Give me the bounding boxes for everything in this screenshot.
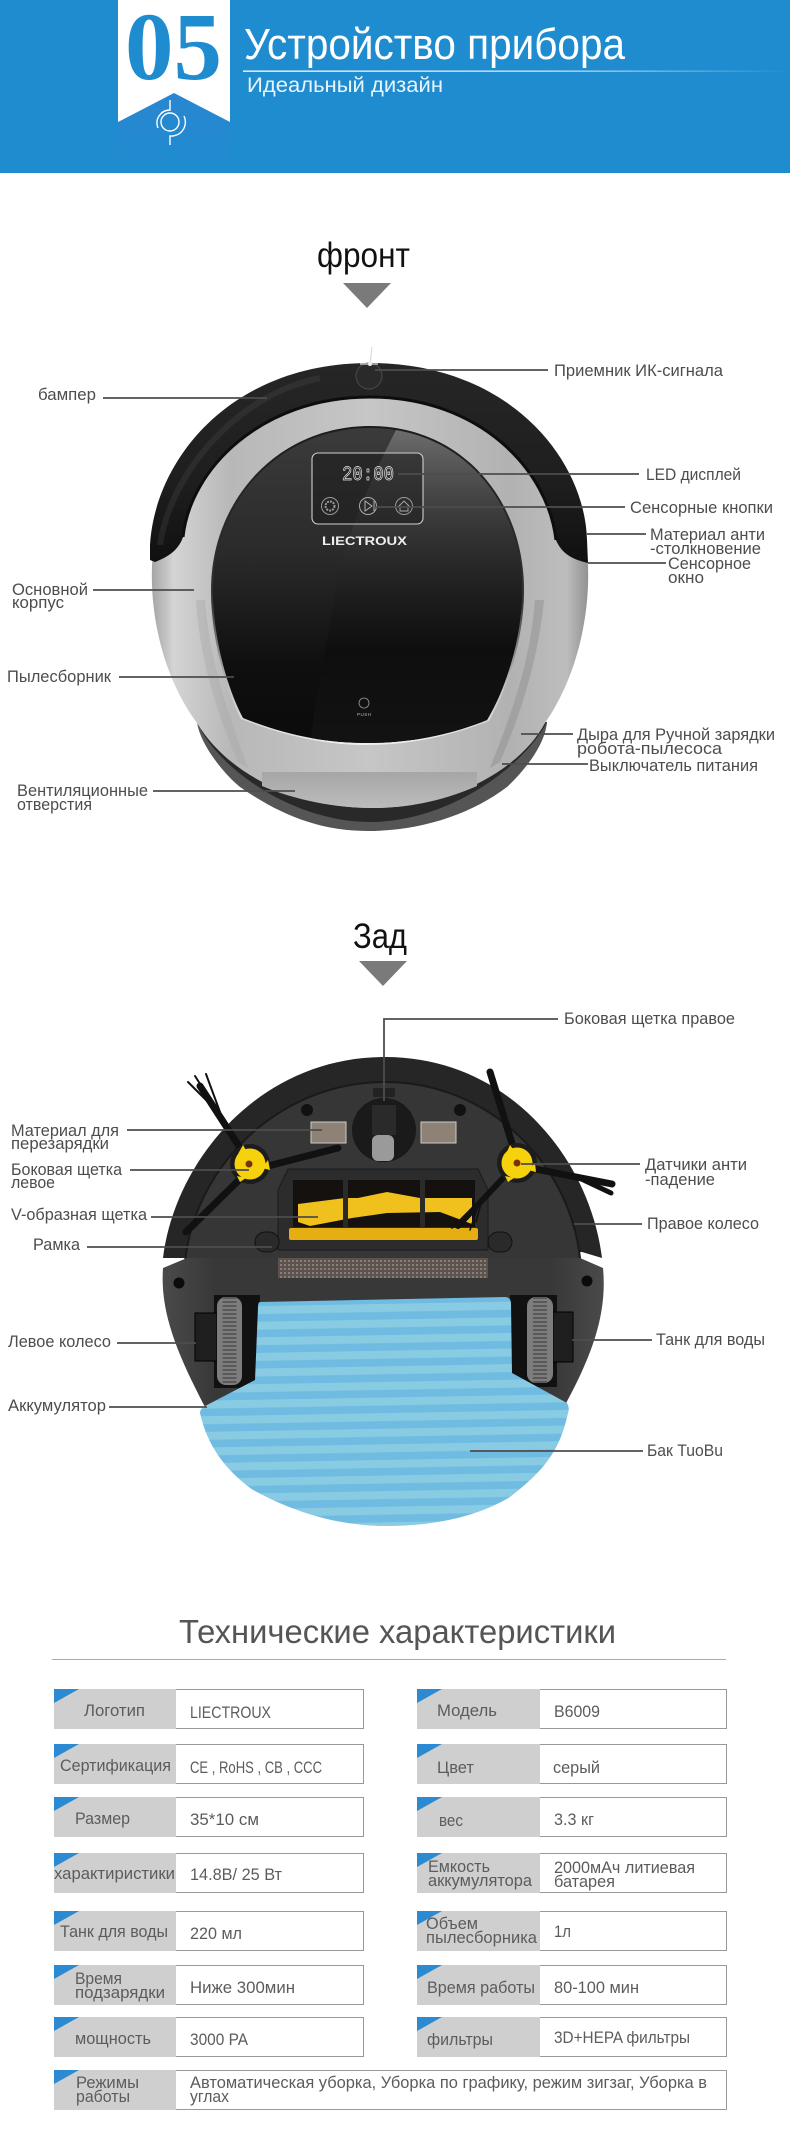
callouts: front view [7, 362, 775, 814]
row: modes: работы [76, 2087, 130, 2106]
robot front view [150, 347, 588, 831]
callout: sensor window [588, 555, 751, 587]
row: model [417, 1689, 726, 1729]
callout: manual charging hole: Дыра для Ручной зарядки [577, 726, 775, 744]
caster wheel [352, 1088, 416, 1162]
row: size [54, 1797, 364, 1837]
brush compartment [255, 1169, 512, 1252]
row: battery capacity: Емкость [428, 1857, 490, 1876]
IR receiver [356, 347, 382, 389]
callout: power switch: Выключатель питания [589, 757, 758, 775]
callout: anti-collision material: Материал анти [650, 526, 765, 544]
callout: frame: Рамка [33, 1236, 81, 1254]
callout: anti-drop sensors: -падение [645, 1171, 715, 1189]
callout: sensor window: окно [668, 569, 704, 587]
callout: sensor window: Сенсорное [668, 555, 751, 573]
heading: front [317, 236, 410, 308]
row: filters: 3D+HEPA фильтры [554, 2028, 690, 2047]
row: logo: Логотип [84, 1701, 145, 1720]
row: modes: Режимы [76, 2073, 139, 2092]
row: battery capacity [417, 1853, 726, 1893]
right drive wheel [510, 1295, 573, 1387]
right side brush [452, 1072, 612, 1230]
callout: anti-drop sensors [521, 1156, 747, 1189]
row: dust bin volume: Объем [426, 1914, 478, 1933]
heading: back [353, 917, 407, 986]
left drive wheel [195, 1295, 260, 1388]
row: working time: Время работы [427, 1978, 535, 1997]
row: model: Модель [437, 1701, 497, 1720]
row: water tank: Танк для воды [60, 1922, 168, 1941]
rear bumper [163, 1057, 602, 1258]
row: water tank: 220 мл [190, 1924, 242, 1943]
row: power: мощность [75, 2029, 151, 2048]
row: modes: Автоматическая уборка, Уборка по графику, режим зигзаг, Уборка в [190, 2073, 707, 2092]
row: modes: углах [190, 2087, 229, 2106]
callout: vents: отверстия [17, 796, 92, 814]
callout: bumper: бампер [38, 386, 96, 404]
left side brush [186, 1074, 338, 1232]
callout: vents [17, 782, 295, 814]
row: color: серый [553, 1758, 600, 1777]
row: modes [54, 2070, 726, 2110]
callout: anti-drop sensors: Датчики анти [645, 1156, 747, 1174]
row: certification: CE , RoHS , CB , CCC [190, 1758, 322, 1777]
row: dust bin volume: 1л [554, 1922, 571, 1941]
row: working time: 80-100 мин [554, 1978, 639, 1997]
row: size: Размер [75, 1809, 130, 1828]
row: weight [417, 1797, 726, 1837]
row: dust bin volume: пылесборника [426, 1928, 538, 1947]
callouts: back view [8, 1010, 765, 1460]
row: model: B6009 [554, 1702, 600, 1721]
callout: LED display: LED дисплей [646, 466, 741, 484]
callout: main body [12, 581, 194, 612]
callout: charging material: перезарядки [11, 1135, 109, 1153]
callout: battery: Аккумулятор [8, 1397, 106, 1415]
row: dust bin volume [417, 1911, 726, 1951]
callout: left side brush: Боковая щетка [11, 1161, 123, 1179]
callout: charging material: Материал для [11, 1122, 119, 1140]
callout: anti-collision material: -столкновение [650, 540, 761, 558]
specs heading: Технические характеристики [179, 1613, 616, 1650]
callout: manual charging hole: робота-пылесоса [577, 740, 723, 758]
header banner [0, 0, 790, 173]
row: weight: вес [439, 1811, 463, 1830]
row: color: Цвет [437, 1758, 474, 1777]
row: filters [417, 2017, 726, 2057]
callout: vents: Вентиляционные [17, 782, 148, 800]
callout: left wheel: Левое колесо [8, 1333, 111, 1351]
row: logo: LIECTROUX [190, 1703, 271, 1722]
row: battery capacity: аккумулятора [428, 1871, 533, 1890]
callout: touch buttons: Сенсорные кнопки [630, 499, 773, 517]
row: filters: фильтры [427, 2030, 493, 2049]
callout: mop tank: Бак TuoBu [647, 1442, 723, 1460]
callout: main body: корпус [12, 594, 64, 612]
row: characteristics: 14.8В/ 25 Вт [190, 1865, 282, 1884]
ribbon with number [114, 0, 234, 165]
heading: front: фронт [317, 236, 410, 275]
charging contacts [311, 1122, 456, 1143]
icon: ribbon emblem [157, 100, 185, 145]
row: characteristics [54, 1853, 364, 1893]
push icon [357, 698, 371, 717]
row: certification: Сертификация [60, 1756, 171, 1775]
row: power: 3000 PA [190, 2030, 249, 2049]
push icon: PUSH [357, 712, 371, 717]
callout: dust bin: Пылесборник [7, 668, 112, 686]
mop cloth [200, 1297, 569, 1526]
row: battery capacity: батарея [554, 1872, 615, 1891]
callout: V-brush: V-образная щетка [11, 1206, 148, 1224]
specs table [54, 1689, 726, 2110]
callout: IR receiver: Приемник ИК-сигнала [554, 362, 724, 380]
callout: charging material [11, 1122, 322, 1153]
row: charging time [54, 1965, 364, 2005]
subtitle: Идеальный дизайн [247, 74, 443, 97]
row: size: 35*10 см [190, 1810, 259, 1829]
row: color [417, 1744, 726, 1784]
exhaust grille [278, 1258, 488, 1278]
row: charging time: Время [75, 1969, 122, 1988]
touch display [312, 453, 423, 524]
robot back view [163, 1057, 612, 1526]
row: power [54, 2017, 364, 2057]
callout: main body: Основной [12, 581, 88, 599]
row: certification [54, 1744, 364, 1784]
callout: water tank: Танк для воды [656, 1331, 765, 1349]
row: working time [417, 1965, 726, 2005]
title: Устройство прибора [244, 20, 625, 69]
callout: left side brush: левое [11, 1174, 55, 1192]
callout: manual charging hole [521, 726, 775, 758]
row: characteristics: характиристики [54, 1864, 175, 1883]
callout: anti-collision material [587, 526, 765, 558]
brand logo: LIECTROUX [322, 536, 407, 548]
row: charging time: подзарядки [75, 1983, 165, 2002]
callout: left side brush [11, 1161, 249, 1192]
row: weight: 3.3 кг [554, 1810, 594, 1829]
callout: right side brush: Боковая щетка правое [564, 1010, 735, 1028]
row: logo [54, 1689, 364, 1729]
row: charging time: Ниже 300мин [190, 1978, 295, 1997]
heading: back: Зад [353, 917, 407, 956]
callout: right wheel: Правое колесо [647, 1215, 759, 1233]
bumper [150, 363, 588, 563]
row: water tank [54, 1911, 364, 1951]
touch display: 20:00 [342, 464, 394, 487]
glossy black panel [211, 426, 540, 745]
row: battery capacity: 2000мАч литиевая [554, 1858, 695, 1877]
lower body [163, 1258, 604, 1407]
callout: right side brush [384, 1010, 735, 1101]
